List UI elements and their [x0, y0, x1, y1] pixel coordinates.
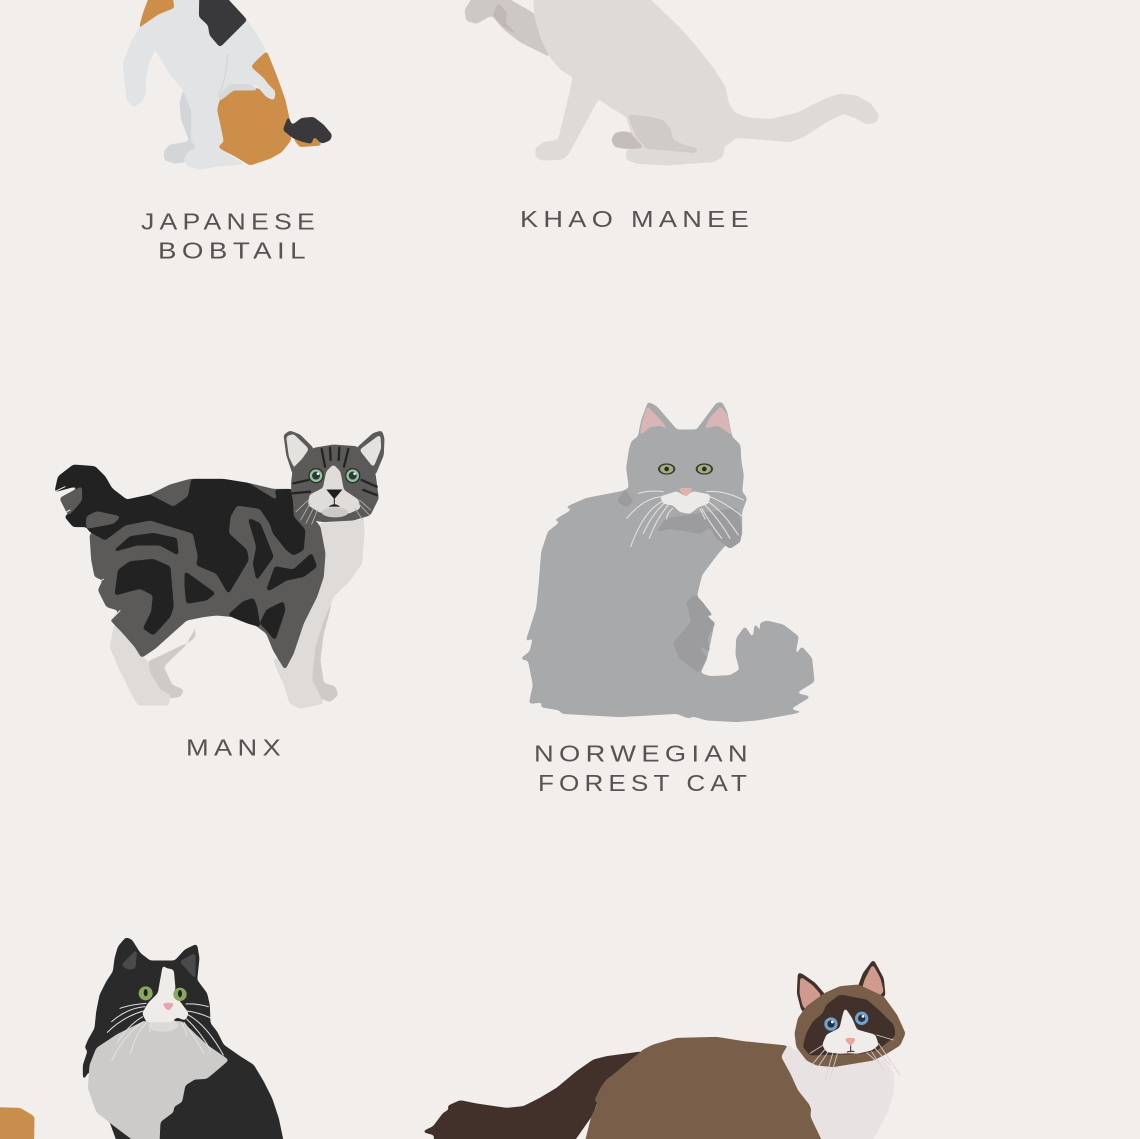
main marking with tail: [55, 465, 305, 593]
paw shadow: [493, 3, 520, 37]
white blaze and muzzle: [143, 965, 188, 1022]
forehead and cheek stripes: [293, 448, 377, 495]
label: Manx: MANX: [186, 734, 286, 760]
fur notches: [57, 487, 120, 620]
label: Japanese Bobtail: JAPANESE: [141, 208, 320, 234]
manx head: [284, 431, 384, 524]
grey fur silhouette: [521, 402, 814, 722]
nose: [844, 1038, 856, 1046]
back leg: [164, 90, 197, 163]
whiskers: [296, 500, 371, 524]
nose: [162, 1003, 174, 1011]
whiskers: [627, 491, 745, 547]
grey chest: [88, 1022, 228, 1139]
hind leg: [628, 115, 698, 153]
muzzle: [661, 492, 710, 513]
right ear: [858, 960, 885, 1003]
nose: [678, 488, 693, 497]
eyes: [308, 468, 360, 483]
raised paw: [465, 0, 550, 57]
eyes: [824, 1012, 868, 1031]
darker neck and chin ruff: [657, 508, 742, 548]
black patch: [199, 0, 247, 47]
head shape: [292, 445, 378, 522]
orange haunch: [217, 52, 291, 165]
cat: Norwegian Forest Cat illustration: [521, 402, 814, 722]
orange cat fragment at bottom edge: [0, 1107, 34, 1139]
inner leg line: [218, 55, 228, 95]
eyes: [139, 986, 187, 1001]
cat: Manx illustration: [55, 465, 364, 708]
cat: Japanese Bobtail illustration: [123, 0, 332, 169]
body and tail: [533, 0, 878, 165]
label: Japanese Bobtail: BOBTAIL: [158, 238, 311, 264]
head fur: [795, 985, 905, 1067]
mouth: [847, 1046, 854, 1052]
tail: [283, 117, 332, 147]
whiskers: [107, 1003, 223, 1061]
cat: ragdoll illustration: [423, 960, 905, 1139]
ragdoll head: [795, 960, 905, 1080]
tail patches: [60, 487, 82, 515]
ear shading: [122, 950, 137, 969]
inner leg shadow: [598, 80, 611, 103]
far front leg: [308, 597, 338, 702]
cat: black and white illustration with orange neighbour fragment: [0, 938, 287, 1139]
dark mask: [803, 995, 895, 1055]
white blaze and muzzle: [823, 1008, 878, 1053]
dark tail: [423, 1052, 643, 1139]
white body: [123, 0, 275, 169]
nose: [327, 490, 341, 507]
near hind leg: [110, 623, 170, 705]
label: Japanese Bobtail: [141, 208, 320, 264]
cat: Khao Manee illustration: [465, 0, 878, 165]
hidden foot: [612, 132, 645, 148]
brown body: [580, 1037, 833, 1139]
far hind leg: [148, 620, 195, 698]
left ear: [797, 973, 825, 1015]
shaded band: [217, 83, 258, 100]
label: Khao Manee: KHAO MANEE: [520, 206, 754, 232]
near front leg and white chest: [273, 520, 364, 708]
white blaze and muzzle: [308, 465, 360, 513]
ears: [284, 431, 313, 475]
whiskers: [810, 1035, 900, 1080]
eyes: [658, 463, 713, 475]
chin: [322, 507, 348, 517]
label: Norwegian Forest Cat: NORWEGIAN: [534, 740, 753, 766]
black tabby markings: [55, 465, 317, 640]
ears: [640, 407, 668, 435]
grey tabby body: [90, 479, 325, 669]
label: Norwegian Forest Cat: [534, 740, 753, 796]
darker hip patch: [673, 595, 715, 672]
orange shoulder patch: [139, 0, 175, 28]
chin: [148, 1018, 178, 1032]
white chest: [782, 1045, 893, 1139]
black body: [83, 938, 287, 1139]
label: Norwegian Forest Cat: FOREST CAT: [538, 770, 752, 796]
